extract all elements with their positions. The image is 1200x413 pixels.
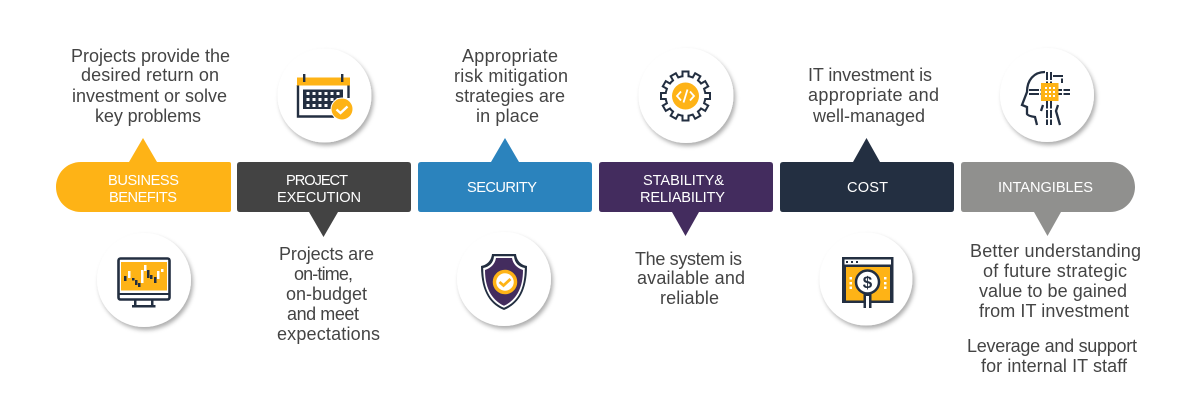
text: business benefits description: Projects provide the bbox=[71, 46, 230, 66]
panel: project execution banner: EXECUTION bbox=[277, 190, 361, 206]
text: security description: Appropriate bbox=[462, 46, 558, 66]
icon: monitor with chart bbox=[97, 233, 191, 327]
panel: security banner: SECURITY bbox=[467, 180, 537, 196]
text: security description: in place bbox=[476, 106, 539, 126]
icon: gear with code symbol bbox=[638, 48, 734, 143]
panel: stability and reliability banner bbox=[599, 162, 773, 236]
icon: dollar magnifier in browser window: $ bbox=[863, 273, 873, 292]
panel: project execution banner: PROJECT bbox=[286, 173, 348, 189]
text: intangibles description: Better understanding bbox=[970, 241, 1141, 261]
text: stability description: reliable bbox=[660, 288, 719, 308]
text: project execution description: expectations bbox=[277, 324, 380, 344]
text: intangibles description: for internal IT staff bbox=[981, 356, 1128, 376]
panel: security banner bbox=[418, 138, 592, 212]
icon: calendar with check bbox=[278, 48, 372, 142]
text: security description bbox=[454, 46, 568, 126]
panel: stability and reliability banner: RELIABILITY bbox=[640, 190, 725, 206]
text: stability description bbox=[635, 249, 745, 308]
text: security description: risk mitigation bbox=[454, 66, 568, 86]
panel: stability and reliability banner: STABILITY& bbox=[643, 173, 724, 189]
text: stability description: available and bbox=[637, 268, 745, 288]
text: project execution description: on-time, bbox=[294, 264, 353, 284]
panel: business benefits banner: BUSINESS bbox=[108, 173, 179, 189]
text: intangibles description: value to be gained bbox=[979, 281, 1127, 301]
text: intangibles description: from IT investment bbox=[979, 301, 1129, 321]
text: business benefits description bbox=[71, 46, 230, 126]
text: project execution description: Projects are bbox=[279, 244, 374, 264]
text: intangibles description bbox=[967, 241, 1141, 376]
text: intangibles description: Leverage and support bbox=[967, 336, 1137, 356]
text: business benefits description: investment or solve bbox=[72, 86, 227, 106]
text: intangibles description: of future strategic bbox=[983, 261, 1127, 281]
text: cost description: appropriate and bbox=[808, 85, 939, 105]
panel: business benefits banner: BENEFITS bbox=[109, 190, 177, 206]
text: project execution description: and meet bbox=[287, 304, 359, 324]
text: cost description bbox=[808, 65, 939, 126]
panel: cost banner bbox=[780, 138, 954, 212]
panel: business benefits banner bbox=[56, 138, 231, 212]
text: stability description: The system is bbox=[635, 249, 742, 269]
text: business benefits description: desired return on bbox=[81, 65, 219, 85]
text: project execution description: on-budget bbox=[286, 284, 367, 304]
text: cost description: IT investment is bbox=[808, 65, 932, 85]
icon: shield with check bbox=[457, 232, 551, 326]
panel: intangibles banner bbox=[961, 162, 1135, 236]
icon: head with chip bbox=[1000, 48, 1094, 142]
icon: dollar magnifier in browser window bbox=[820, 232, 912, 326]
text: project execution description bbox=[277, 244, 380, 344]
text: cost description: well-managed bbox=[812, 106, 925, 126]
panel: cost banner: COST bbox=[847, 180, 888, 196]
text: security description: strategies are bbox=[455, 86, 565, 106]
text: business benefits description: key problems bbox=[95, 106, 201, 126]
panel: intangibles banner: INTANGIBLES bbox=[998, 180, 1093, 196]
panel: project execution banner bbox=[237, 162, 411, 237]
